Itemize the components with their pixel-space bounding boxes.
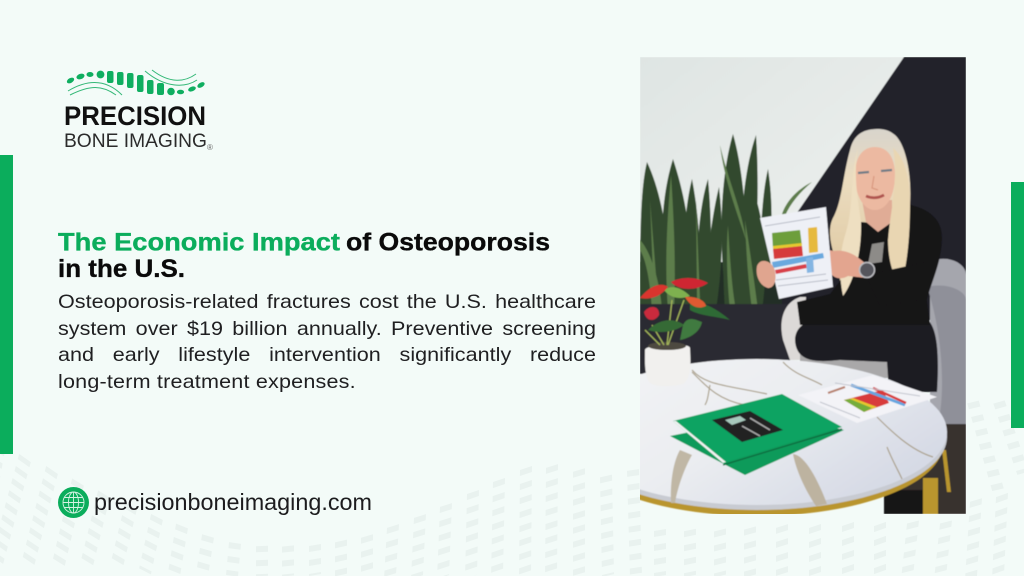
folder label: [712, 411, 783, 442]
legs: [795, 317, 938, 392]
dark sofa: [640, 304, 790, 374]
table gold base: [640, 449, 952, 514]
heading: [58, 228, 550, 283]
armchair: [781, 259, 966, 424]
marble table top: [640, 358, 948, 511]
holding hand: [757, 261, 776, 288]
body text: [58, 291, 596, 393]
potted anthurium: [640, 277, 730, 374]
green folder: [670, 394, 844, 475]
body text: system over $19 billion annually. Preventive screening: [58, 318, 596, 340]
heading: in the U.S.: [58, 255, 185, 283]
watch: [860, 262, 874, 278]
logo icon: green spine: [66, 70, 206, 95]
front hair strands: [840, 148, 861, 296]
forearm sleeve: [868, 262, 926, 306]
body text: and early lifestyle intervention significantly reduce: [58, 344, 596, 366]
body text: Osteoporosis-related fractures cost the U.S. healthcare: [58, 291, 596, 313]
photo: woman presenting bone density report at marble table: [640, 57, 966, 514]
logo wordmark: BONE IMAGING: [64, 130, 207, 152]
woman: [795, 129, 942, 392]
report sheet on table: [798, 375, 937, 423]
shirt print: [868, 242, 884, 264]
website row: [58, 487, 372, 518]
logo wordmark: ®: [207, 143, 213, 152]
neck: [862, 200, 892, 232]
held report sheet: [760, 207, 833, 299]
black sweater: [797, 204, 942, 325]
icon: globe: [58, 487, 89, 518]
body text: long-term treatment expenses.: [58, 371, 356, 393]
left green accent bar: [0, 155, 13, 454]
hair back: [830, 129, 910, 296]
right green accent bar: [1011, 182, 1024, 428]
logo: Precision Bone Imaging: [64, 70, 213, 152]
wall: [640, 57, 904, 263]
dark wall triangle: [770, 57, 966, 320]
heading: of Osteoporosis: [346, 228, 550, 256]
heading: The Economic Impact: [58, 228, 341, 256]
snake plant: [640, 134, 812, 310]
pointing hand: [829, 250, 864, 279]
face: [855, 147, 895, 210]
floor: [900, 423, 966, 514]
website url: precisionboneimaging.com: [94, 489, 372, 515]
logo wordmark: [64, 101, 213, 152]
logo wordmark: PRECISION: [64, 101, 206, 131]
